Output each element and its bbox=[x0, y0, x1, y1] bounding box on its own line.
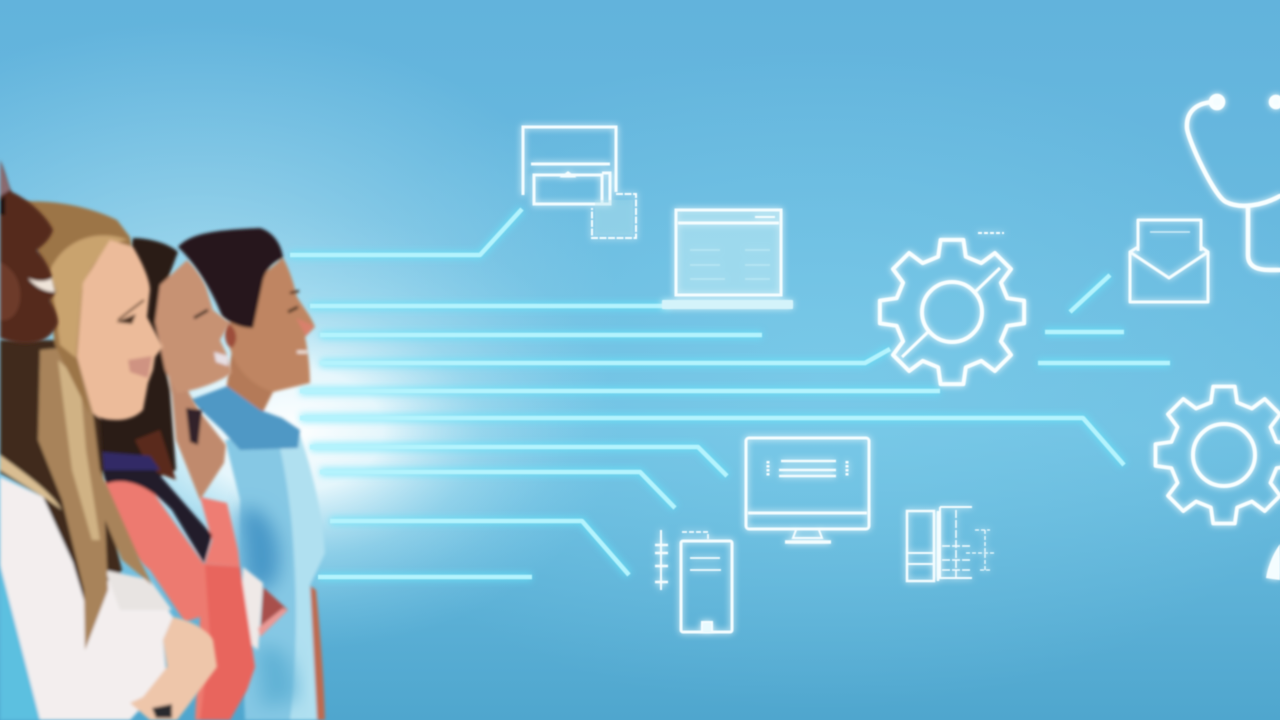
icon: partial rocket bbox=[1266, 544, 1280, 580]
coral woman hair bbox=[95, 238, 178, 480]
icon: monitor bbox=[746, 438, 869, 542]
man shirt bbox=[225, 432, 325, 720]
person: blonde woman in white top bbox=[0, 201, 217, 720]
coral woman chest and neck bbox=[160, 330, 226, 500]
coral woman top bbox=[103, 478, 255, 720]
icon: mobile phone bbox=[655, 530, 732, 632]
blonde woman dark hair bbox=[0, 340, 122, 670]
blonde woman arm bbox=[130, 617, 217, 720]
icon: stethoscope bbox=[1187, 96, 1280, 270]
man ear bbox=[225, 322, 236, 348]
blonde woman golden hair lock bbox=[38, 345, 152, 650]
coral woman face bbox=[155, 260, 232, 393]
coral woman collar bbox=[186, 408, 202, 445]
person: young man in blue shirt bbox=[178, 228, 325, 720]
icon: laptop bbox=[662, 210, 793, 309]
man neck bbox=[226, 350, 276, 414]
blonde woman hair top bbox=[20, 201, 133, 415]
coral woman white inner shirt bbox=[240, 567, 263, 650]
blonde woman face bbox=[77, 240, 163, 420]
left woman face bbox=[0, 160, 58, 344]
coral woman backpack strap bbox=[100, 462, 212, 563]
person: woman in coral top bbox=[95, 238, 288, 720]
icon: envelope bbox=[1130, 220, 1208, 302]
coral woman hand bbox=[260, 587, 288, 637]
man face bbox=[228, 258, 315, 392]
man collar bbox=[190, 386, 300, 450]
circuit lines bbox=[290, 209, 1170, 577]
blonde woman white top bbox=[0, 477, 173, 720]
person: woman at left edge bbox=[0, 160, 58, 344]
man arm bbox=[306, 585, 325, 720]
icon: gear right bbox=[1156, 387, 1280, 523]
man hair bbox=[178, 228, 283, 328]
icon: flow chart bbox=[907, 507, 995, 581]
blonde woman blue sleeve of neighbor bbox=[0, 565, 40, 720]
icon: large gear bbox=[880, 233, 1024, 384]
icon: printer window bbox=[523, 127, 636, 238]
